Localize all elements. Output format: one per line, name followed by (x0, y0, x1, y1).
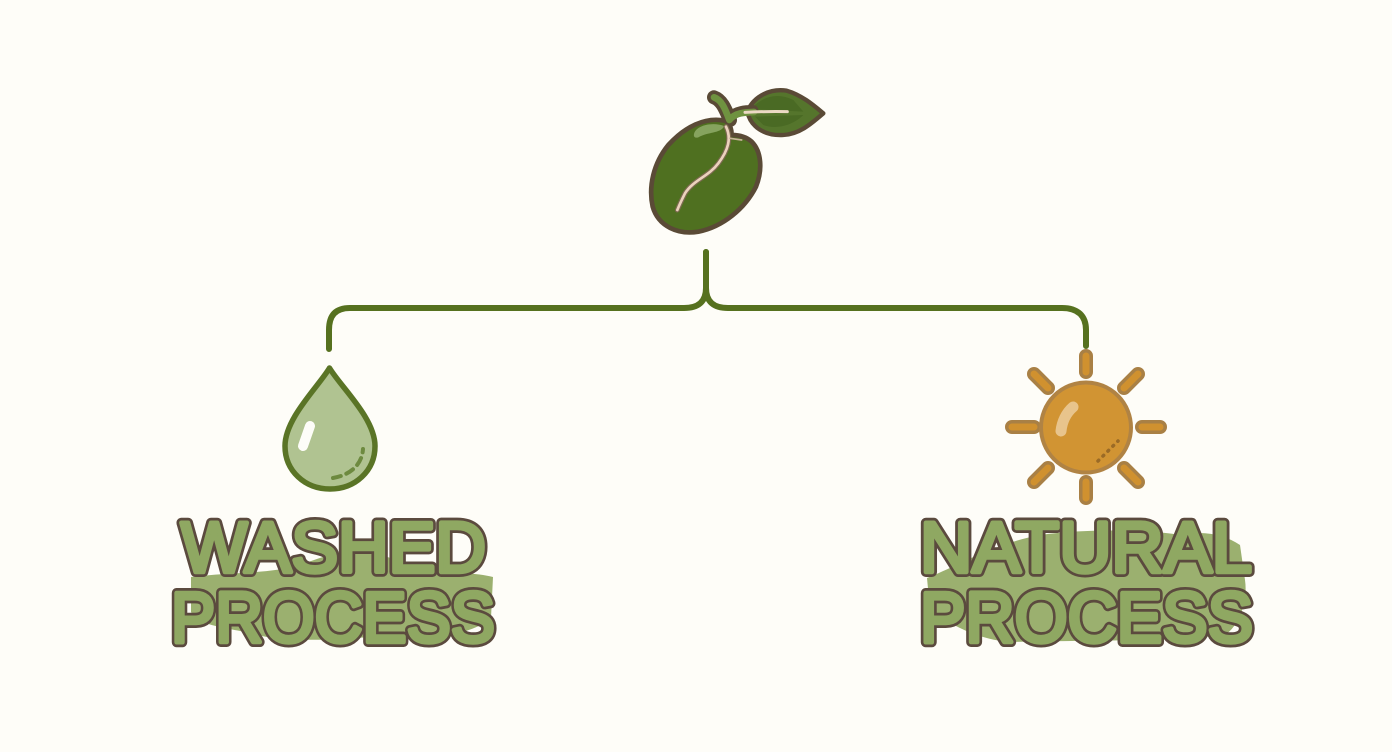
heading text: WASHED (181, 509, 486, 588)
drop shine dashes (333, 449, 363, 478)
crease branch (730, 138, 742, 140)
heading text: NATURAL (920, 509, 1252, 588)
heading text: PROCESS (920, 579, 1253, 658)
heading text (171, 509, 495, 658)
sun speckles (1098, 441, 1118, 461)
label: washed process (171, 509, 495, 658)
branching connector (329, 252, 1086, 349)
heading text: WASHED (181, 509, 486, 588)
heading text: PROCESS (171, 579, 495, 658)
bean body (651, 120, 760, 232)
heading text: PROCESS (171, 579, 495, 658)
stem (714, 97, 730, 120)
bean crease (677, 127, 729, 210)
sun rays (1012, 356, 1160, 498)
sun disc (1041, 382, 1131, 472)
drop highlight (303, 426, 310, 446)
leaf vein (745, 107, 787, 117)
icon: sun (1012, 356, 1160, 498)
sun highlight (1061, 407, 1073, 431)
heading text (920, 509, 1253, 658)
label: natural process (920, 509, 1253, 658)
brush swatch (927, 530, 1246, 642)
icon: coffee bean with leaf (651, 90, 823, 232)
heading text: NATURAL (920, 509, 1252, 588)
heading text: PROCESS (920, 579, 1253, 658)
icon: water drop (285, 368, 375, 489)
stem joint outline (730, 110, 753, 117)
brush swatch (191, 551, 493, 640)
leaf shading (755, 96, 803, 127)
stem fill (714, 97, 754, 120)
bean highlight (694, 124, 724, 138)
leaf (747, 90, 823, 135)
